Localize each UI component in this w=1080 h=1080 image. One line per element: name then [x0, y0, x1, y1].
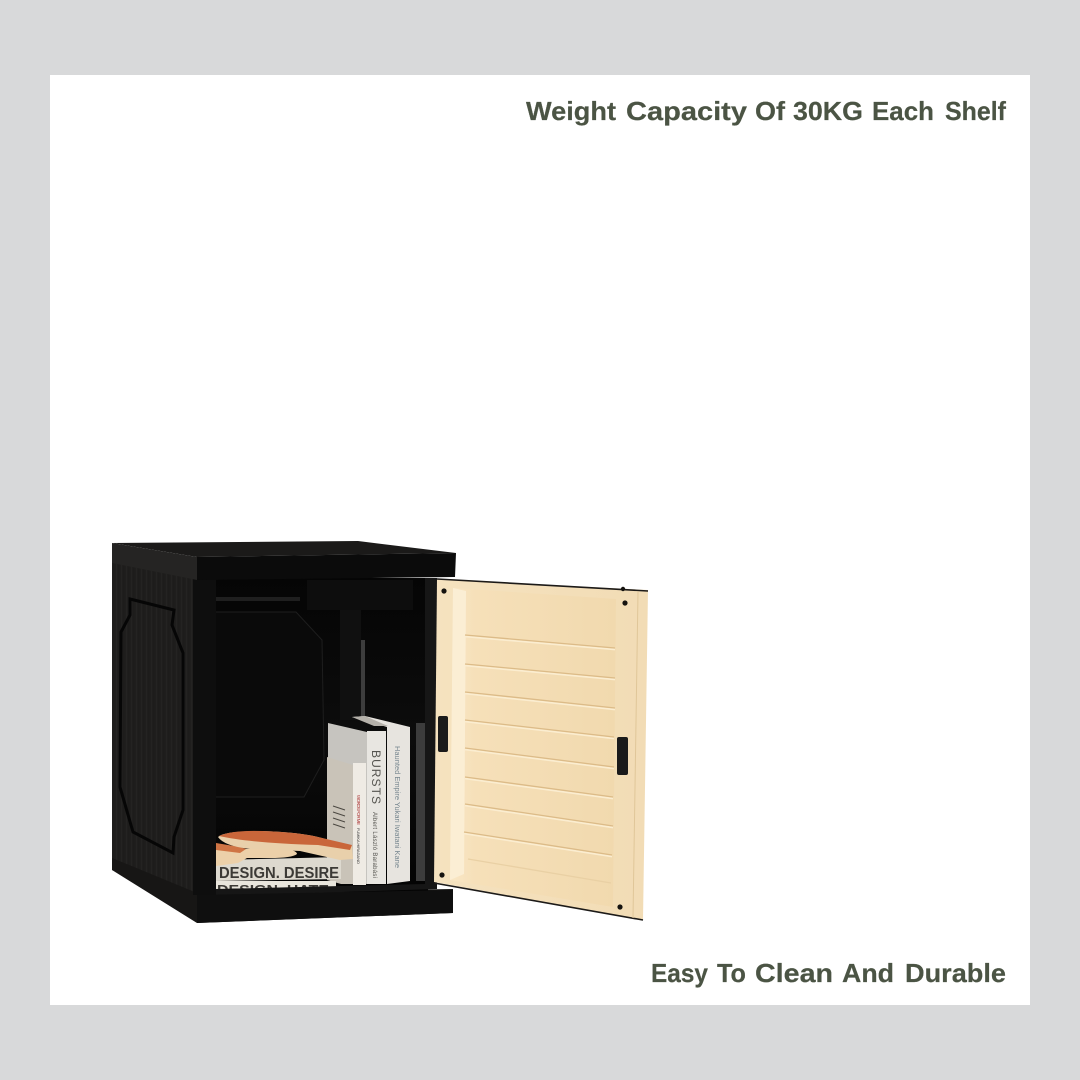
- rear panel moulding: [216, 612, 324, 797]
- book: BURSTS author: Albert László Barabási: [371, 812, 377, 878]
- heading: easy to clean: Easy: [651, 958, 708, 988]
- door recessed panel: [450, 588, 616, 907]
- book: front spine lower text: FUMIKA HIRAGANO: [356, 828, 361, 864]
- door top and bottom dark edges: [434, 579, 648, 920]
- cabinet front base rail: [197, 890, 453, 923]
- heading: easy to clean: Clean: [755, 958, 833, 988]
- heading: easy to clean: To: [717, 958, 746, 988]
- book: cover text lines: [333, 806, 345, 828]
- heading: weight capacity: Shelf: [945, 96, 1006, 126]
- book: front beige cover: [327, 757, 353, 884]
- book: front spine text: WORDS FOR ME: [356, 795, 361, 825]
- right wall: [416, 723, 425, 881]
- design books: DESIGN. DESIRE: [219, 865, 339, 882]
- book: Haunted Empire spine text: Haunted Empire Yukari Iwatani Kane: [393, 746, 402, 868]
- door recess left wall: [450, 588, 466, 880]
- lower paddle: [216, 845, 297, 866]
- table tennis paddles: [216, 831, 353, 866]
- door left latch: [438, 716, 448, 752]
- heading: easy to clean: Durable: [905, 958, 1006, 988]
- door screws: [439, 587, 628, 910]
- book: Haunted Empire, white: [352, 716, 410, 884]
- book: front spine: [353, 763, 366, 885]
- rear post: [340, 610, 361, 720]
- side raised moulding: [120, 599, 183, 853]
- upper brace: [307, 580, 413, 610]
- heading: weight capacity: Of: [755, 96, 785, 126]
- cabinet lid: [112, 541, 456, 580]
- books stack: [327, 716, 410, 885]
- book: BURSTS title: BURSTS: [369, 750, 383, 804]
- cabinet base: [112, 858, 453, 923]
- upper paddle: [218, 831, 353, 860]
- open door: [434, 579, 648, 920]
- cabinet illustration: [112, 541, 648, 923]
- door outer shell: [434, 579, 648, 920]
- book: BURSTS spine: [367, 731, 386, 884]
- cabinet interior: [214, 578, 428, 892]
- heading: weight capacity: 30KG: [793, 96, 863, 126]
- design books: [216, 857, 341, 897]
- door edge strip: [633, 592, 638, 918]
- front pillar right: [425, 578, 437, 889]
- white panel: [50, 75, 1030, 1005]
- front pillar left: [193, 579, 216, 895]
- cabinet floor: [216, 884, 437, 896]
- door right latch: [617, 737, 628, 775]
- heading: easy to clean: And: [842, 958, 894, 988]
- heading: weight capacity: Each: [872, 96, 934, 126]
- heading: weight capacity: Weight: [526, 96, 616, 126]
- cabinet left side panel: [112, 560, 194, 893]
- door slats: [464, 635, 615, 883]
- heading: weight capacity: Capacity: [626, 96, 748, 126]
- book: large grey: [328, 723, 367, 884]
- design books: DESIGN. HATE: [217, 882, 329, 897]
